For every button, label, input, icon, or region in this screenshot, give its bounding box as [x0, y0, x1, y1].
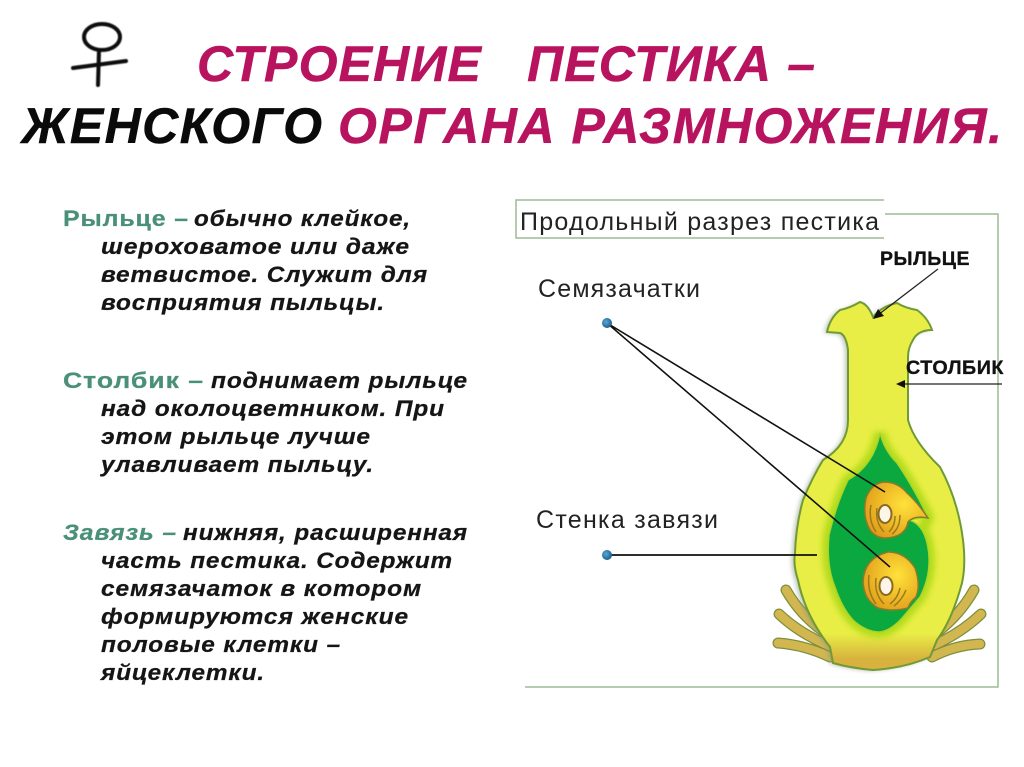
text block: ovary: [63, 520, 468, 685]
ovary cavity: [828, 433, 929, 632]
text block: style: улавливает пыльцу.: [100, 452, 374, 477]
icon: female symbol: [73, 24, 126, 85]
arrow: stigma: [873, 269, 938, 319]
text block: style: поднимает рыльце: [211, 368, 468, 393]
pistil body: [794, 302, 964, 670]
text block: stigma: Рыльце –: [63, 206, 189, 231]
text block: stigma: [63, 206, 428, 315]
text block: style: этом рыльце лучше: [101, 424, 371, 449]
arrow: style: [896, 380, 1002, 388]
text block: style: Столбик –: [63, 368, 204, 393]
text block: stigma: обычно клейкое,: [194, 206, 411, 231]
text block: ovary: формируются женские: [101, 604, 409, 629]
label: style: СТОЛБИК: [906, 358, 1004, 379]
lime band around cavity: [828, 433, 929, 632]
title: ЖЕНСКОГО: [19, 98, 322, 154]
label: ovules: Семязачатки: [538, 275, 700, 303]
ovule upper: [865, 482, 928, 538]
text block: ovary: нижняя, расширенная: [183, 520, 468, 545]
label: ovary wall: Стенка завязи: [536, 506, 718, 534]
title: ОРГАНА РАЗМНОЖЕНИЯ.: [338, 98, 1002, 154]
text block: stigma: восприятия пыльцы.: [101, 290, 385, 315]
label: stigma: РЫЛЬЦЕ: [880, 249, 970, 270]
text block: ovary: яйцеклетки.: [100, 660, 265, 685]
text block: stigma: ветвистое. Служит для: [101, 262, 428, 287]
text block: ovary: Завязь –: [63, 520, 177, 545]
diagram frame: [516, 200, 998, 687]
ovule lower: [863, 552, 918, 610]
text block: ovary: семязачаток в котором: [101, 576, 422, 601]
title: СТРОЕНИЕ ПЕСТИКА –: [197, 36, 815, 92]
sepals: [778, 590, 981, 657]
pointer: ovules: [602, 318, 890, 567]
pistil shadow: [791, 303, 961, 671]
text block: ovary: половые клетки –: [101, 632, 341, 657]
text block: style: над околоцветником. При: [101, 396, 445, 421]
text block: style: [63, 368, 468, 477]
title: [19, 36, 1002, 154]
text block: ovary: часть пестика. Содержит: [101, 548, 453, 573]
diagram heading: Продольный разрез пестика: [520, 208, 879, 236]
pistil diagram: [778, 302, 981, 671]
pointer: ovary wall: [602, 550, 817, 560]
text block: stigma: шероховатое или даже: [101, 234, 410, 259]
